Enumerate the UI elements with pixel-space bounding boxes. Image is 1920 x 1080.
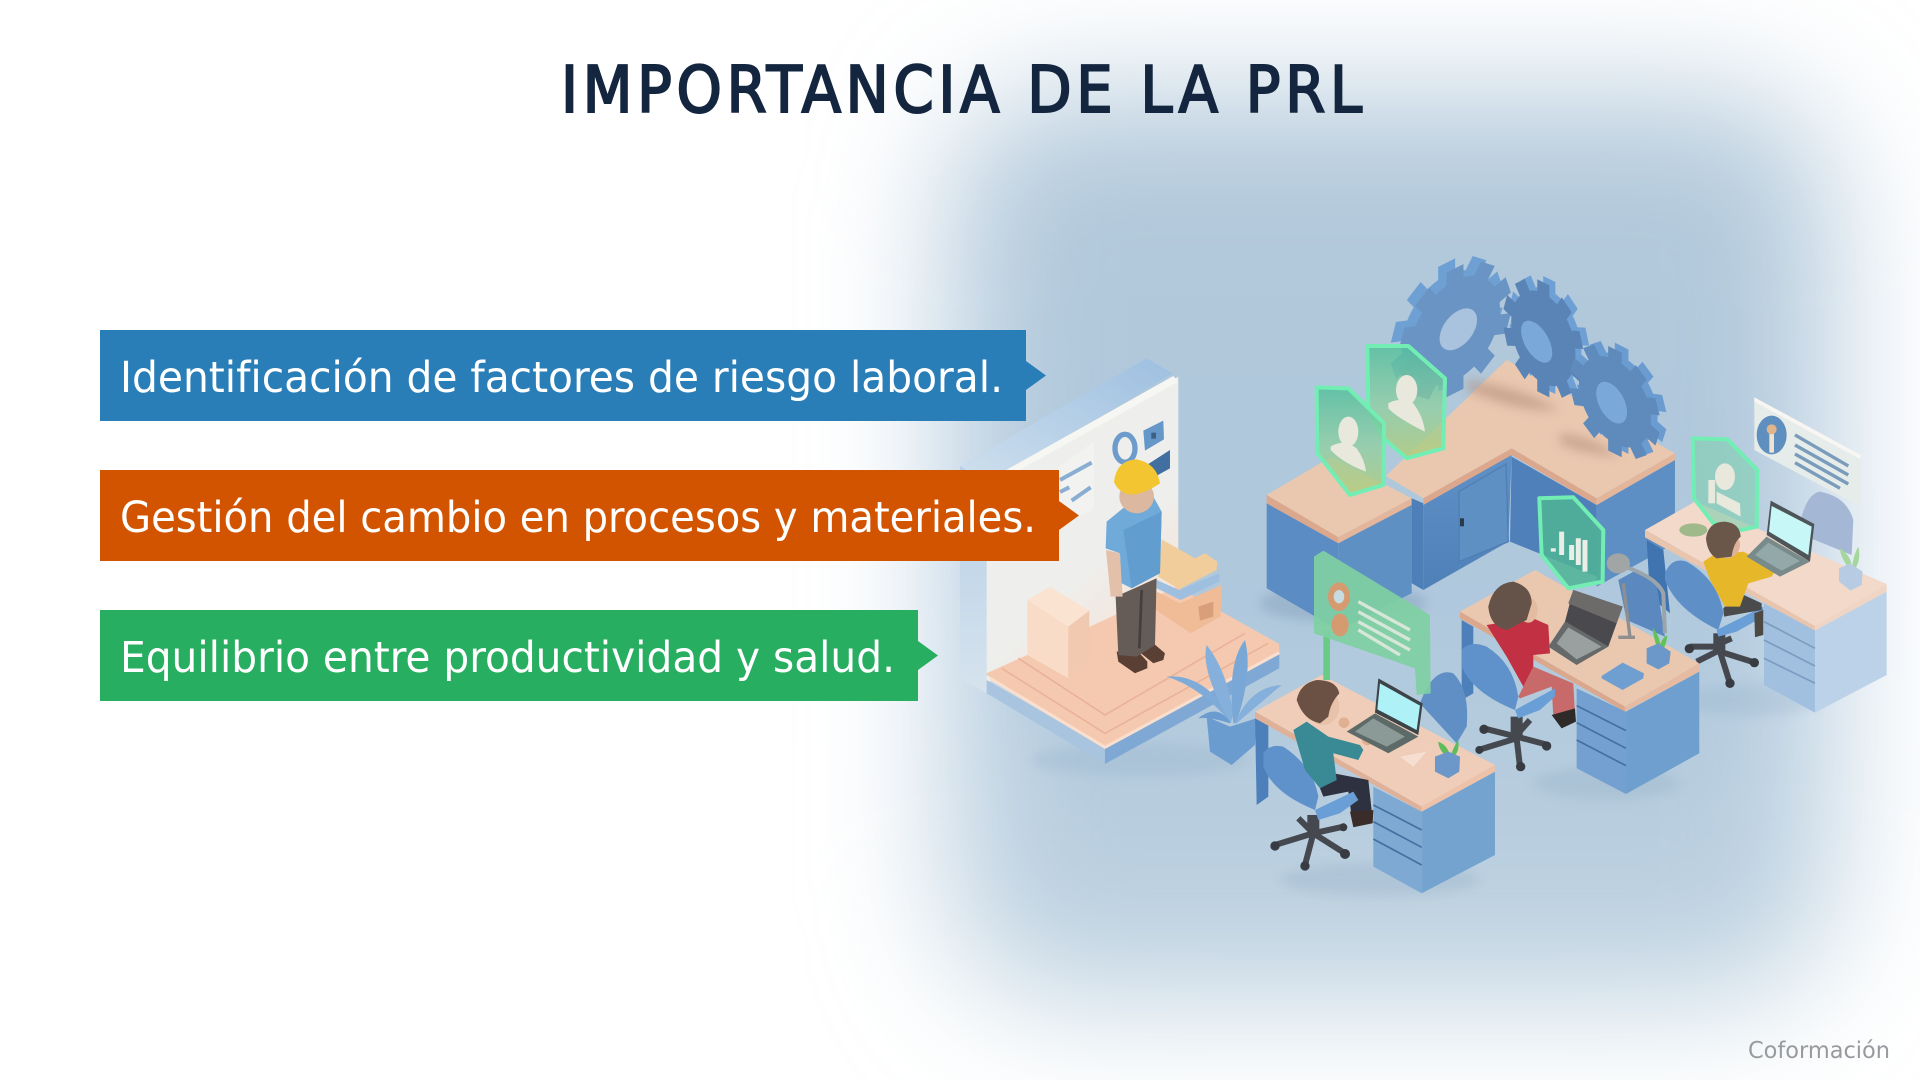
display wall xyxy=(960,358,1178,693)
gear one xyxy=(1391,235,1511,421)
yellow worker xyxy=(1703,522,1777,637)
banner: productivity and health xyxy=(100,610,938,701)
chair: red worker xyxy=(1462,644,1576,771)
green info panel xyxy=(1314,551,1431,695)
plant pot: right desk xyxy=(1839,547,1863,591)
display wall, platform and worker xyxy=(960,358,1282,777)
floor shadow under front desk xyxy=(1280,863,1480,897)
teal worker xyxy=(1293,680,1373,788)
red worker xyxy=(1487,582,1550,687)
banner: productivity and health: Equilibrio entre productividad y salud. xyxy=(120,633,895,683)
central desk blocks xyxy=(1267,360,1675,630)
worker with yellow helmet xyxy=(1106,459,1165,673)
desk body xyxy=(1645,502,1887,713)
gear two xyxy=(1503,259,1589,414)
middle desk body xyxy=(1460,570,1699,794)
floor shadow under platform xyxy=(1030,743,1250,777)
laptop: red worker xyxy=(1548,590,1623,665)
laptop: teal worker xyxy=(1347,678,1423,753)
green shield: person 1 xyxy=(1317,387,1384,495)
banner: change management: Gestión del cambio en procesos y materiales. xyxy=(120,493,1036,543)
chair: yellow worker xyxy=(1665,560,1763,688)
right desk with yellow worker xyxy=(1645,397,1887,717)
gear three xyxy=(1570,324,1666,476)
title: IMPORTANCIA DE LA PRL xyxy=(561,54,1362,128)
green shield: person 3 xyxy=(1693,438,1757,530)
green shield: person 2 xyxy=(1367,346,1445,458)
chair: teal worker xyxy=(1263,746,1373,871)
floor shadow under central desk xyxy=(1260,583,1427,623)
footer credit: Coformación xyxy=(1748,1038,1890,1064)
laptop: yellow worker xyxy=(1747,501,1814,577)
floor shadow under right desk xyxy=(1687,683,1820,717)
stepped platform xyxy=(987,587,1279,764)
book xyxy=(1602,663,1644,690)
box xyxy=(1027,587,1089,678)
background: soft blue haze xyxy=(950,95,1830,1000)
stacked materials xyxy=(1156,539,1222,633)
banner: risk identification: Identificación de factores de riesgo laboral. xyxy=(120,353,1003,403)
central L-shaped desk and gears xyxy=(1260,235,1675,630)
banner: change management xyxy=(100,470,1079,561)
plant pot: middle desk xyxy=(1647,627,1671,669)
potted plant xyxy=(1167,640,1282,765)
gear shadows on desk xyxy=(1467,380,1620,457)
green shield: chart xyxy=(1539,497,1603,588)
floor shadow under middle desk xyxy=(1533,767,1680,800)
info card xyxy=(1754,397,1861,507)
front and middle desks xyxy=(1255,551,1699,897)
back chair xyxy=(1800,492,1853,555)
front desk body xyxy=(1255,672,1495,893)
illustration: isometric office xyxy=(960,235,1887,897)
desk lamp xyxy=(1607,553,1665,637)
plant pot: front desk xyxy=(1435,740,1460,778)
banner: risk identification xyxy=(100,330,1046,421)
